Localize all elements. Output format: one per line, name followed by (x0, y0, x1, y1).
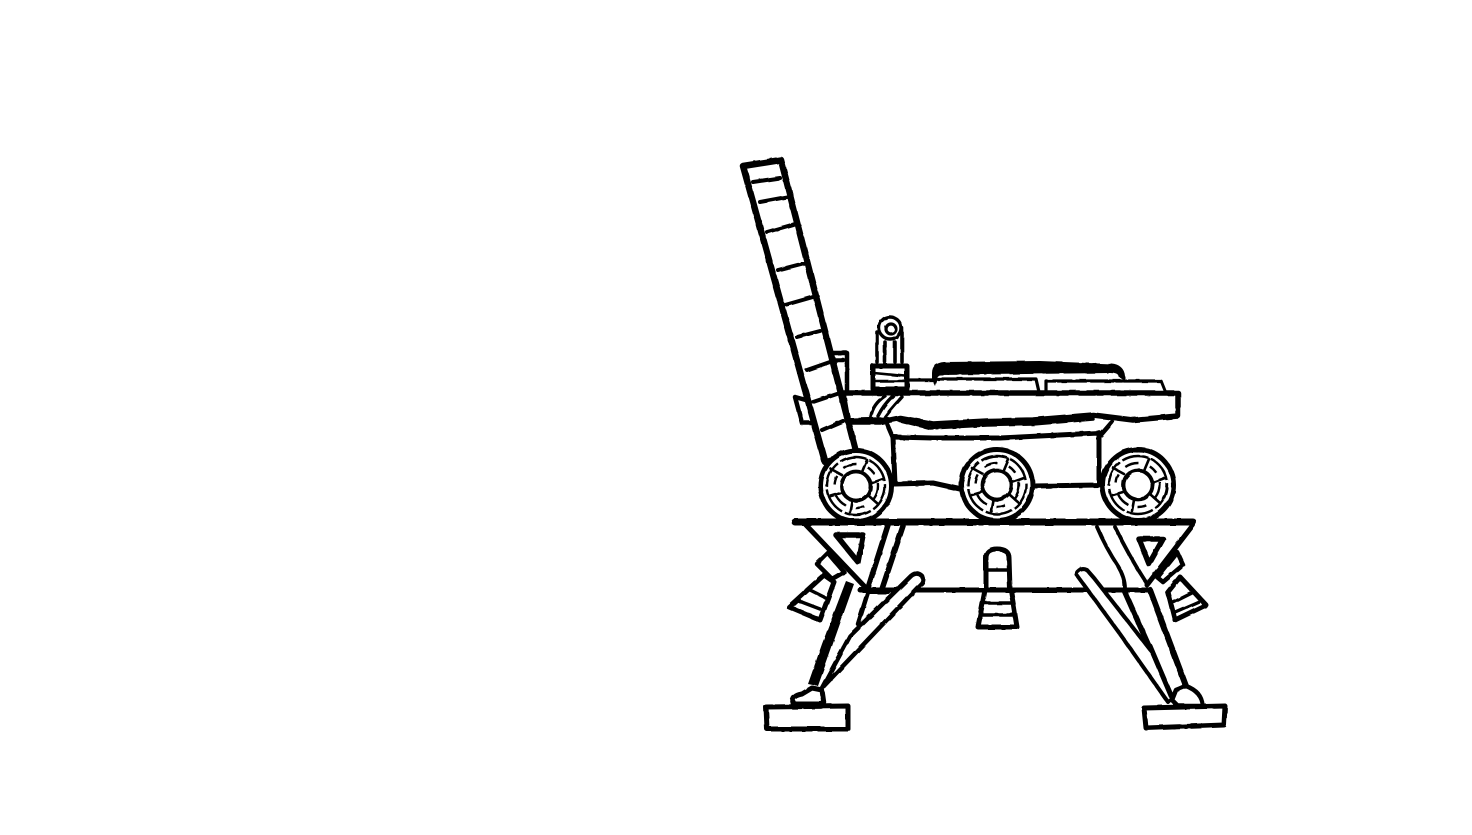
solar mast ladder (743, 160, 856, 462)
left foot pad (766, 706, 848, 729)
right landing leg (1076, 569, 1203, 706)
wheel: rear (1102, 450, 1174, 520)
rover deck (843, 393, 1178, 428)
lander body (795, 522, 1193, 590)
wheel: middle (962, 450, 1032, 520)
lander left thruster (789, 553, 844, 620)
rover body (887, 422, 1112, 489)
wheel: front (820, 450, 892, 522)
lander centre thruster (978, 549, 1017, 627)
left inner triangle (836, 535, 863, 562)
left landing leg (793, 574, 923, 704)
lander right thruster (1157, 552, 1206, 620)
right foot pad (1144, 706, 1225, 728)
camera mast (873, 317, 907, 389)
solar panel (910, 361, 1165, 392)
right inner triangle (1139, 539, 1163, 564)
rear bracket behind mast (795, 353, 847, 423)
